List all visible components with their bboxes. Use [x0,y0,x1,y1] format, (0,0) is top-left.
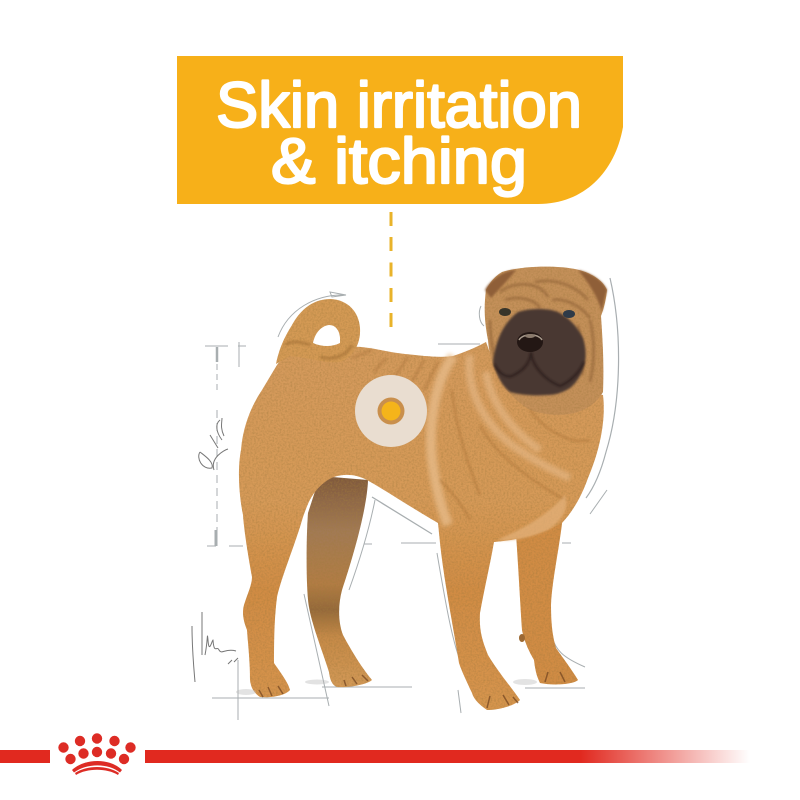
far hind leg [307,476,372,687]
fur-textured dog silhouette [239,267,607,710]
construction sketch lines [205,278,619,720]
title: Skin irritation [216,69,582,141]
tail shading [286,342,352,358]
ground shadows [236,679,537,695]
light shoulder fold [431,356,453,525]
artist signature scribble [192,612,238,682]
height measure scribble [199,418,228,470]
far front leg [515,515,578,684]
nose [517,332,543,352]
main body, chest and near legs [239,342,604,710]
chest highlight [497,495,566,541]
muzzle shading [494,352,584,386]
dashed connector line [390,212,392,327]
neck fold highlights [469,355,570,478]
ears [485,270,516,298]
tail [276,299,360,364]
neck fold shadows [440,390,590,520]
icon: crown logo [58,733,136,775]
head [485,267,607,415]
title: & itching [271,125,527,197]
eyes [499,308,511,316]
muzzle [493,309,586,395]
heading banner [177,56,623,204]
paw details [259,672,565,708]
footer brand bar [0,733,750,775]
marker: itching location [355,375,427,447]
icon: dewclaw [519,634,525,642]
dog illustration [236,267,607,710]
forehead wrinkles [490,281,594,382]
back wrinkles [352,350,438,390]
title [216,69,582,197]
